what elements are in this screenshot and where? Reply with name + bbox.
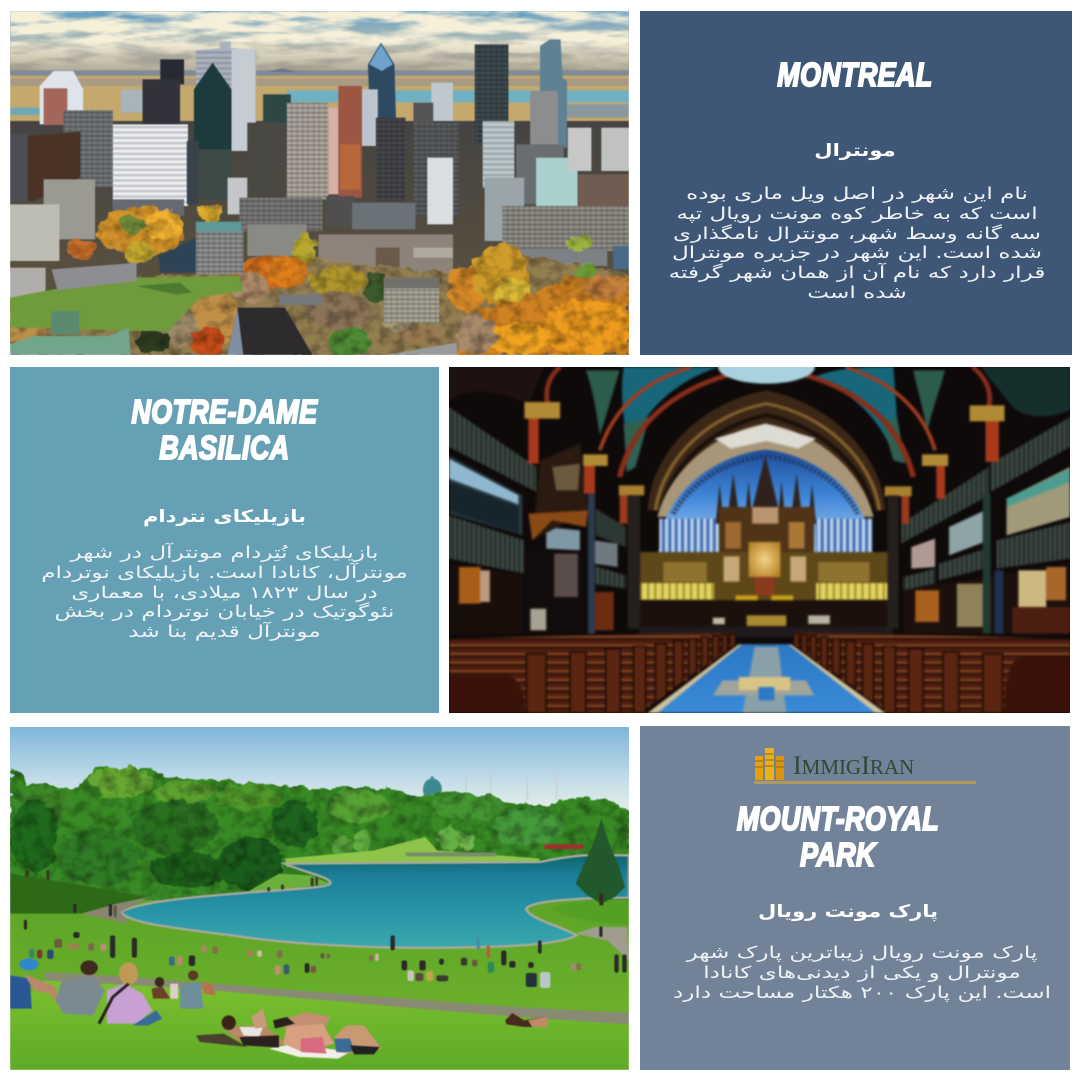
apse arch and blue sanctuary [657, 424, 874, 554]
heading: Notre-Dame Basilica: BASILICA [159, 429, 290, 466]
heading: Montreal: MONTREAL [777, 56, 933, 93]
photo: Montreal skyline in autumn [10, 11, 629, 355]
mid-rise buildings [10, 179, 629, 298]
far land and river [10, 68, 629, 355]
columns [524, 402, 1005, 634]
text block: basilica description: مونترآل قدیم بنا شد [128, 622, 321, 641]
text block: park description [673, 943, 1051, 1002]
text block: Montreal description: قرار دارد که نام آن از همان شهر گرفته [669, 263, 1045, 282]
text block: Montreal description: شده است. این شهر در جزیره مونترال [672, 243, 1042, 262]
distant masts and dome [423, 770, 557, 801]
text block: basilica description: نئوگوتیک در خیابان نوتردام در بخش [54, 602, 394, 621]
heading: Mount-Royal Park [736, 800, 939, 873]
text block: Montreal description: نام این شهر در اصل ویل ماری بوده [686, 184, 1028, 203]
lawns [10, 837, 629, 1070]
carved pulpit [524, 444, 588, 634]
skyscrapers [10, 39, 629, 241]
text block: basilica description: در سال ۱۸۲۳ میلادی، با معماری [71, 583, 378, 602]
text block: Montreal description: شده است [807, 283, 907, 302]
heading: Mount-Royal Park: PARK [800, 836, 876, 873]
left galleries [449, 407, 626, 634]
lake [121, 855, 629, 948]
text block: park description: پارک مونت رویال زیباترین پارک شهر [687, 943, 1037, 962]
main altar [639, 455, 893, 637]
text block: park description: مونترال و یکی از دیدنی‌های کانادا [703, 963, 1021, 982]
foreground buildings [10, 222, 457, 355]
text block: Montreal description: سه گانه وسط شهر، مونترال نامگذاری [673, 224, 1041, 243]
photo: Mount Royal park and Beaver Lake [10, 727, 629, 1070]
sitting visitors [10, 958, 216, 1025]
panel: Mount Royal Park [640, 726, 1070, 1070]
panel: Montreal [640, 11, 1072, 355]
text block: basilica description: بازیلیکای نُتِردام مونترآل در شهر [71, 543, 378, 562]
logo: ImmigIran [754, 748, 976, 784]
distant people on the lawn [24, 844, 627, 988]
shoreline promontory and conifer [81, 819, 629, 960]
text block: Montreal description: است که به خاطر کوه مونت رویال تپه [676, 204, 1038, 223]
subheading: Persian name: مونترال [814, 141, 896, 161]
text block: park description: است. این پارک ۲۰۰ هکتار مساحت دارد [673, 983, 1051, 1002]
vaulted ceiling [449, 350, 1070, 510]
heading: Mount-Royal Park: MOUNT-ROYAL [737, 800, 939, 837]
panel: Notre-Dame Basilica [10, 367, 439, 713]
foreground lawn [10, 980, 629, 1070]
sky with clouds [10, 11, 629, 74]
heading: Notre-Dame Basilica [131, 393, 319, 466]
right galleries [901, 417, 1070, 634]
subheading: Persian name: پارک مونت رویال [758, 902, 938, 922]
autumn foliage [6, 203, 633, 358]
text block: Montreal description [669, 184, 1045, 302]
walking path [44, 972, 629, 1024]
text block: basilica description [41, 543, 408, 641]
pews [449, 632, 1070, 713]
subheading: Persian name: بازیلیکای نتردام [143, 507, 306, 527]
icon: gold building bars [755, 748, 784, 780]
photo: Notre-Dame Basilica interior [449, 367, 1070, 713]
sunbathers on towel [196, 1009, 548, 1059]
logo underline [754, 781, 976, 784]
text block: basilica description: مونترآل، کانادا است. بازیلیکای نوتردام [41, 563, 408, 582]
sky [10, 727, 629, 817]
tree line [10, 766, 629, 904]
heading: Notre-Dame Basilica: NOTRE-DAME [131, 393, 318, 430]
blue aisle [647, 644, 885, 713]
logo wordmark: IMMIGIRAN [793, 751, 914, 780]
